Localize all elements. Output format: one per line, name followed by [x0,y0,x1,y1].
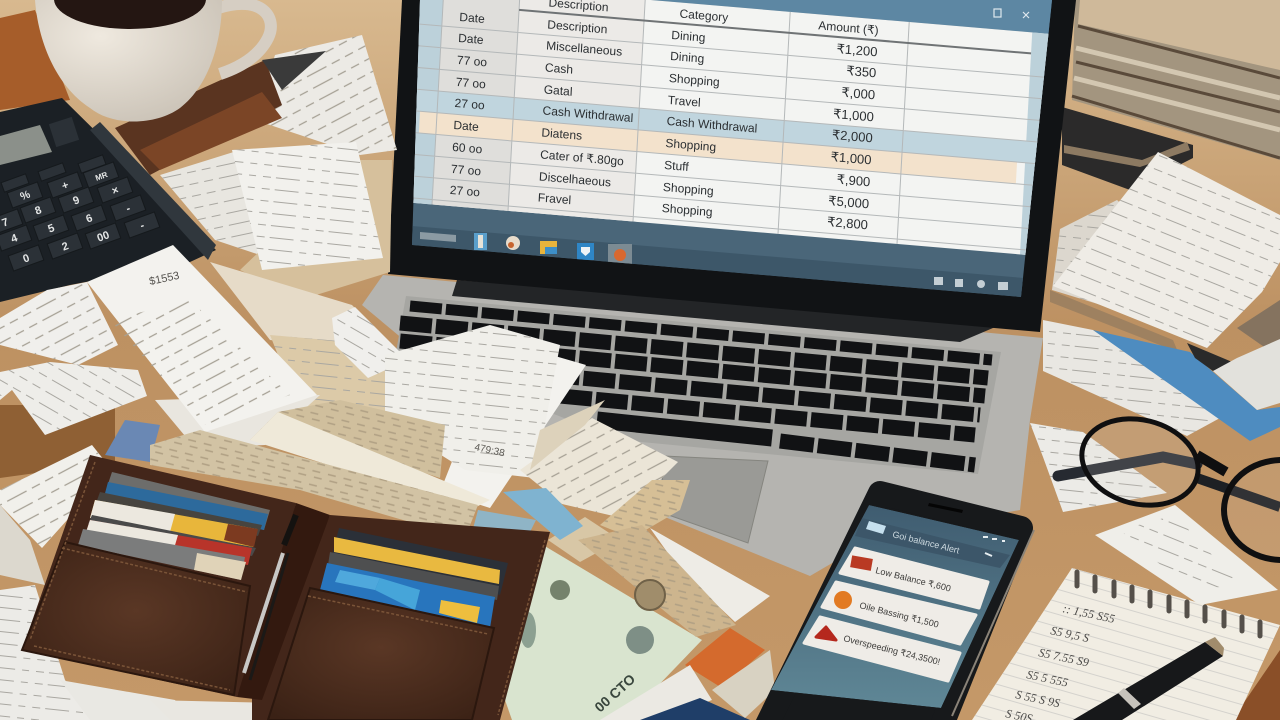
orange notebook under cup [0,10,70,110]
pen [1073,637,1224,720]
wallet left half back [22,455,296,697]
central receipts [385,325,678,518]
handwriting: S5 7.55 S9 [1037,645,1090,670]
white receipt top [232,142,383,270]
cup handle [218,4,271,74]
taskbar [412,226,1024,297]
wallet right half back [252,515,550,720]
calculator keys: + [60,179,70,193]
description column: Diatens [541,125,582,143]
handwriting [1004,601,1116,720]
description column: Description [547,17,608,36]
touchpad [660,456,768,543]
left papers lower [0,445,370,720]
alert card: low balance [840,548,988,608]
calculator keys: % [19,189,32,203]
date column: Date [459,10,485,26]
amount column [818,21,878,230]
category column: Shopping [661,201,713,219]
amount column: ₹,000 [841,85,875,102]
laptop screen [412,0,1052,297]
calculator keys: 00 [96,229,111,245]
calculator keys [0,155,160,271]
table background [395,0,1057,257]
cup body [35,0,222,122]
laptop screen bezel [388,0,1076,332]
blue banknote corner [503,488,583,540]
calculator keys: 0 [21,252,31,266]
description column: Cash Withdrawal [542,103,634,125]
date column: 77 oo [455,75,487,91]
small curled receipt [332,307,408,378]
alert card: bill: Oile Bassing ₹1,500 [859,600,940,630]
spreadsheet window [385,0,1080,258]
calculator display [0,125,52,165]
large receipt [87,245,317,432]
small receipts left [0,282,147,435]
date column: Date [458,31,484,47]
cards and papers under phone [600,628,775,720]
dark wood band at left [0,405,115,478]
calculator keys: 4 [9,232,20,246]
paper stack behind receipt [160,150,392,300]
description column: Gatal [543,82,573,99]
smartphone [762,493,1034,720]
amount column: ₹1,200 [836,41,878,59]
date column: 77 oo [457,53,488,69]
description column [538,0,633,204]
amount column: ₹350 [846,63,877,80]
description column: Miscellaneous [546,38,623,59]
green rupee note [498,545,702,720]
date column: 27 oo [449,183,481,199]
alert header text: Goi balance Alert [892,529,961,556]
category column: Shopping [669,71,720,89]
tan paper pile [155,262,390,448]
calculator keys: - [125,203,132,215]
eyeglasses [1058,407,1280,560]
alert card: overspending: Overspeeding ₹24,3500! [843,633,941,667]
dark device on books [1062,107,1193,190]
phone screen [771,505,1019,708]
earpiece [928,503,963,513]
calculator keys: 8 [33,204,43,218]
wallet [22,455,550,720]
table grid lines [395,0,1047,256]
wallet stitching [30,462,545,715]
description column: Cater of ₹.80go [540,147,625,168]
glasses arm [1058,457,1197,476]
calculator keys: 5 [46,222,56,236]
taskbar app icons [474,233,632,264]
amount column: ₹1,000 [830,149,872,167]
category column: Shopping [663,180,714,198]
category column: Travel [667,93,701,110]
alert card: low balance: Low Balance ₹,600 [875,565,952,594]
paper under glasses [1030,423,1167,512]
wallet centre gusset [237,503,330,700]
amount column: ₹,900 [836,172,871,189]
handwriting: S5 5 555 [1025,667,1069,690]
amount column: Amount (₹) [818,18,879,37]
coffee cup [35,0,271,122]
tan rupee note stack [578,525,736,637]
left front pocket [22,542,250,695]
phone side edge [952,530,1034,716]
white receipt by rupee note [650,528,770,622]
date column: 77 oo [451,162,482,178]
handwriting: :: 1,55 S55 [1061,601,1116,626]
pen tip behind cup [262,51,326,90]
calculator keys: - [139,220,146,232]
category column: Stuff [664,158,690,174]
right book corner [1237,300,1280,358]
description column: Cash [545,60,573,77]
paper behind cup [255,35,397,155]
category column: Shopping [665,136,716,154]
calculator keys: MR [94,170,109,183]
category column: Category [679,7,729,25]
status icons [983,537,1005,556]
amount column: ₹1,000 [833,106,874,124]
phone body [762,493,1021,720]
alert header bar [855,518,1010,568]
paper beside notebook [1095,505,1278,605]
description column: Fravel [537,190,572,207]
system tray icons [934,277,1008,290]
category column: Dining [670,49,705,66]
brown leather book [115,60,282,175]
date column: 27 oo [454,96,485,112]
spiral notepad [972,568,1280,720]
amount column: ₹5,000 [828,193,869,211]
banknote bundle from wallet [105,400,536,552]
date column: 60 oo [452,140,483,156]
description column: Discelhaeous [539,169,611,189]
alert card: bill [822,582,976,644]
blue folder with papers [1043,320,1280,441]
handwriting: S5 9,5 S [1049,623,1090,645]
amount column: ₹2,000 [832,127,873,145]
category column [662,10,757,218]
alert card: overspending [804,617,960,681]
handwriting: S 55 S 9S [1014,687,1061,710]
laptop base [362,275,1043,576]
note denomination: 00 CTO [591,671,638,715]
receipt total text: $1553 [148,270,181,288]
calculator keys: 6 [84,212,94,226]
window buttons [994,9,1029,18]
tan strip under receipt [1050,290,1178,352]
right front pocket [268,588,494,720]
calculator keys: 2 [60,240,70,254]
taskbar search box [420,232,456,242]
right paper stack [1050,152,1280,352]
amount column: ₹2,800 [827,214,868,232]
left lens [1073,407,1207,517]
calculator keys: × [110,184,120,198]
coffee surface [54,0,206,29]
tan note pieces [548,480,690,562]
calculator keys: 9 [71,194,81,208]
cards left slots [78,472,270,580]
zipper and inner strip [244,515,296,680]
category column: Dining [671,28,706,45]
laptop hinge [452,280,1000,342]
date column [450,12,486,196]
right lens [1224,460,1280,560]
cards right slots [320,528,508,628]
large statement sheet [1053,152,1280,348]
second glasses arm [1197,478,1280,507]
date column: Date [453,118,479,134]
notebook corner wood [1232,650,1280,720]
category column: Cash Withdrawal [666,114,758,136]
highlighted rows [416,92,1038,162]
receipt total number: 479:38 [473,442,506,459]
glasses bridge [1197,455,1226,472]
keyboard [396,296,1001,474]
calculator [0,98,216,302]
stacked books top right [1072,0,1280,160]
app icon [866,521,886,534]
notepad spiral binding [1077,572,1260,636]
window title bar [654,0,1052,34]
calculator keys: 7 [0,216,10,230]
